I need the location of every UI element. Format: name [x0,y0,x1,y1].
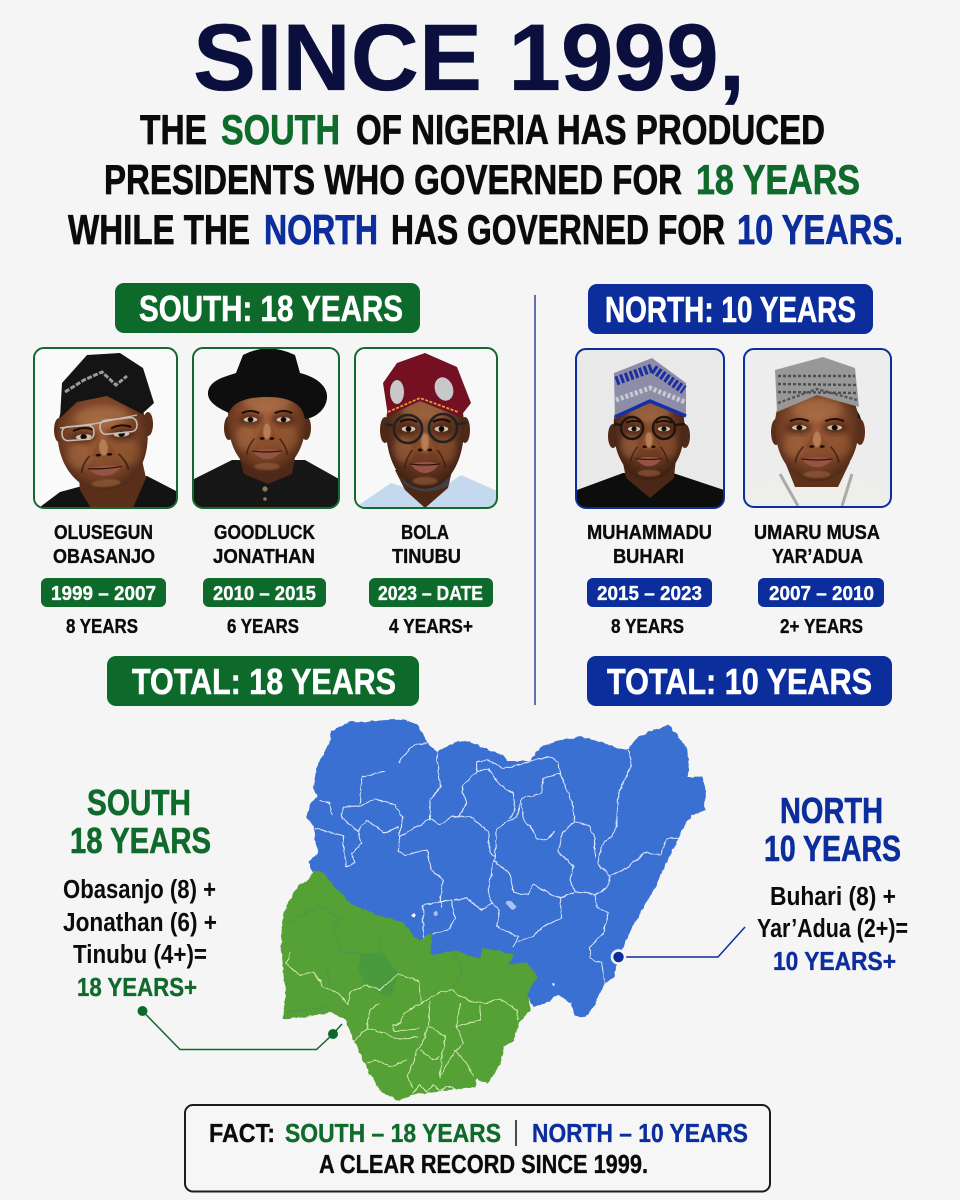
callout: south: 18 YEARS+ [77,974,197,1002]
profile: Buhari: 8 YEARS [611,615,684,638]
fact box: NORTH – 10 YEARS [532,1120,748,1148]
callout: north: Buhari (8) + [770,883,896,911]
heading: north: NORTH: 10 YEARS [605,289,856,330]
callout: south: 18 YEARS [70,820,211,861]
callout: south: Tinubu (4+)= [73,941,207,969]
profile: Jonathan: 2010 – 2015 [213,582,316,605]
fact box: FACT: [209,1120,275,1148]
subtitle: HAS GOVERNED FOR [391,206,725,253]
map of Nigeria [282,720,705,1099]
fact box: A CLEAR RECORD SINCE 1999. [319,1151,648,1179]
connector: south [138,1006,342,1050]
profile: Yar'Adua: UMARU MUSA [754,521,880,544]
callout: south [63,782,217,1002]
profile: Obasanjo: 1999 – 2007 [51,582,156,605]
total: south: TOTAL: 18 YEARS [132,661,396,702]
callout: north: 10 YEARS+ [773,948,896,976]
callout: south: Obasanjo (8) + [63,876,216,904]
profile: Jonathan [203,521,326,638]
callout: south: SOUTH [87,782,191,823]
profile: Jonathan: JONATHAN [213,545,315,568]
subtitle: WHILE THE [68,206,250,253]
portrait: Buhari [576,349,724,510]
profile: Buhari [587,521,712,638]
subtitle [68,106,903,253]
profile: Yar'Adua: 2007 – 2010 [769,582,874,605]
profile: Tinubu: 2023 – DATE [378,582,483,605]
subtitle: THE [140,106,207,153]
profile: Tinubu: 4 YEARS+ [389,615,473,638]
heading: south: SOUTH: 18 YEARS [139,288,403,329]
subtitle: 18 YEARS [696,156,860,203]
profile: Obasanjo: 8 YEARS [66,615,138,638]
callout: south: Jonathan (6) + [63,909,217,937]
connector: north [612,927,745,964]
profile: Yar'Adua: 2+ YEARS [780,615,863,638]
heading: north [588,284,873,334]
portrait: Obasanjo [34,348,178,510]
fact box: SOUTH – 18 YEARS [285,1120,501,1148]
profile: Jonathan: GOODLUCK [214,521,315,544]
profile: Buhari: MUHAMMADU [587,521,712,544]
profile: Yar'Adua: YAR’ADUA [772,545,863,568]
profile: Obasanjo: OBASANJO [53,545,155,568]
heading: south [115,283,420,333]
subtitle: NORTH [264,206,378,253]
profile: Yar'Adua [754,521,884,638]
callout: north: Yar’Adua (2+)= [757,915,908,943]
portrait: Tinubu [355,348,497,510]
fact box [185,1105,770,1192]
profile: Tinubu: BOLA [401,521,449,544]
subtitle: 10 YEARS. [737,206,903,253]
portrait: Yar'Adua [744,349,891,509]
map region: north [307,720,705,1017]
total: north: TOTAL: 10 YEARS [607,661,872,702]
portrait: Jonathan [193,348,339,510]
profile: Buhari: BUHARI [613,545,684,568]
profile: Jonathan: 6 YEARS [227,615,299,638]
callout: north: NORTH [780,790,883,831]
subtitle: PRESIDENTS WHO GOVERNED FOR [104,156,682,203]
profile: Obasanjo: OLUSEGUN [54,521,153,544]
title: SINCE 1999, [193,5,745,111]
profile: Obasanjo [41,521,166,638]
callout: north [757,790,908,976]
profile: Tinubu: TINUBU [392,545,461,568]
subtitle: SOUTH [221,106,340,153]
profile: Tinubu [369,521,493,638]
profile: Buhari: 2015 – 2023 [597,582,702,605]
map region: south [282,871,537,1099]
subtitle: OF NIGERIA HAS PRODUCED [356,106,825,153]
callout: north: 10 YEARS [764,828,901,869]
